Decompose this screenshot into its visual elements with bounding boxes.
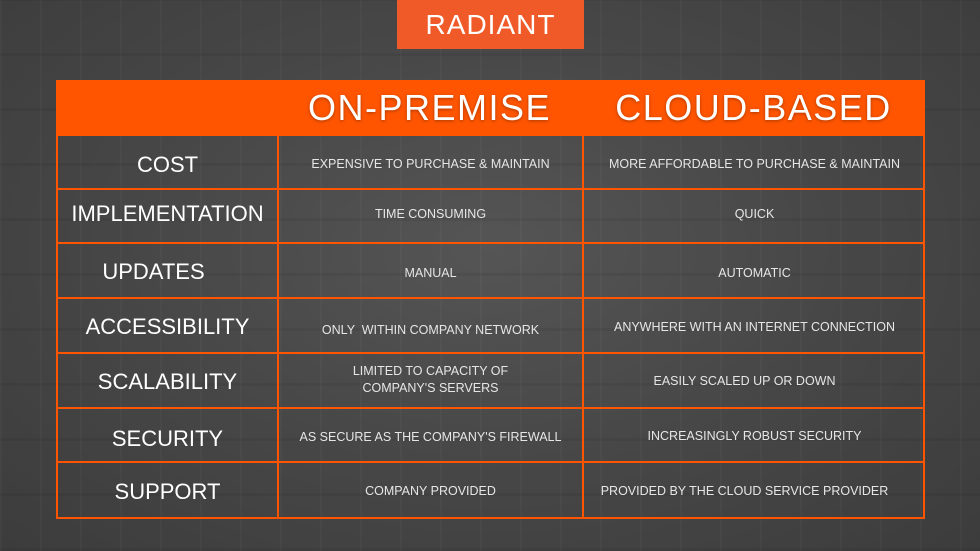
table body: TIME CONSUMING	[375, 207, 486, 221]
table body: MANUAL	[404, 266, 457, 280]
table body: ONLY WITHIN COMPANY NETWORK	[322, 323, 539, 337]
row: implementation: IMPLEMENTATION	[71, 201, 264, 226]
table body: INCREASINGLY ROBUST SECURITY	[648, 428, 861, 442]
row: accessibility	[58, 299, 279, 354]
table body: AUTOMATIC	[718, 266, 791, 280]
row: security: SECURITY	[112, 426, 223, 451]
row: cost: COST	[137, 152, 198, 176]
table body: AS SECURE AS THE COMPANY'S FIREWALL	[300, 430, 561, 444]
table body	[56, 135, 925, 519]
table body: QUICK	[735, 207, 774, 221]
row: accessibility: ACCESSIBILITY	[86, 314, 249, 338]
row: scalability	[58, 354, 279, 409]
row: updates	[58, 244, 279, 299]
table body: ANYWHERE WITH AN INTERNET CONNECTION	[614, 320, 895, 334]
header row	[56, 80, 925, 136]
row: updates: UPDATES	[102, 259, 205, 284]
heading: cloud-based: CLOUD-BASED	[615, 87, 892, 128]
table body: EXPENSIVE TO PURCHASE & MAINTAIN	[311, 157, 550, 171]
row: support: SUPPORT	[115, 478, 220, 504]
table body: EASILY SCALED UP OR DOWN	[654, 374, 836, 388]
row: scalability: SCALABILITY	[98, 368, 237, 394]
logo: RADIANT	[397, 0, 584, 49]
table body: LIMITED TO CAPACITY OF	[353, 364, 508, 378]
row: security	[58, 409, 279, 463]
table body: COMPANY'S SERVERS	[362, 380, 498, 394]
heading: on-premise: ON-PREMISE	[308, 87, 551, 128]
logo: RADIANT: RADIANT	[426, 9, 555, 40]
table body: MORE AFFORDABLE TO PURCHASE & MAINTAIN	[609, 157, 900, 171]
row: support	[58, 463, 279, 517]
table body: COMPANY PROVIDED	[365, 484, 496, 498]
row: implementation	[58, 190, 279, 244]
table body: PROVIDED BY THE CLOUD SERVICE PROVIDER	[601, 484, 888, 498]
comparison table	[56, 80, 925, 519]
row: cost	[58, 135, 279, 190]
